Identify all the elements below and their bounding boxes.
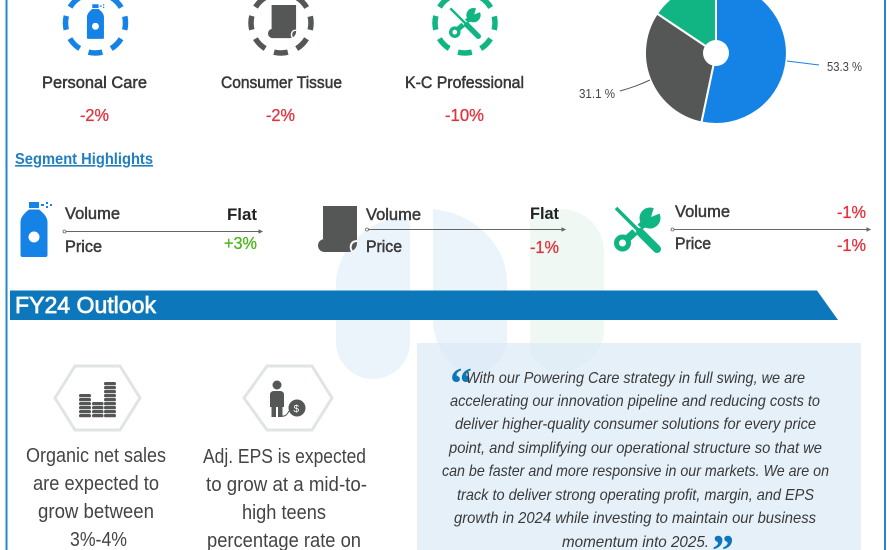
panel: consumer tissue highlight: Price [366,237,402,256]
heading: segment highlights: Segment Highlights [15,151,153,168]
panel: segment icons row [42,0,524,125]
label: personal care: Personal Care [42,73,147,92]
panel: organic net sales outlook: Organic net sales [26,445,166,467]
panel: adjusted EPS outlook: high teens [242,502,326,524]
panel: personal care highlight: +3% [224,233,257,253]
icon: spray [20,202,52,257]
panel: organic net sales outlook: grow between [38,501,154,523]
quote text: point, and simplifying our operational structure so that we [448,440,822,457]
quote text: accelerating our innovation pipeline and reducing costs to [450,393,820,410]
quote text: With our Powering Care strategy in full swing, we are [466,370,805,387]
icon: tools [616,204,664,249]
quote mark open: “ [450,359,472,408]
pie label 53.3%: 53.3 % [827,59,862,74]
right border [884,0,886,550]
icon: person and dollar in hexagon: $ [294,404,300,415]
panel: consumer tissue highlight: Volume [366,205,421,224]
value: personal care change: -2% [80,105,109,125]
panel: adjusted EPS outlook: to grow at a mid-to- [206,474,367,496]
left border [6,0,8,550]
panel: personal care highlight: Flat [227,205,257,224]
banner: FY24 Outlook [10,290,838,320]
panel: personal care highlight: Volume [65,204,120,223]
panel: adjusted EPS outlook [203,366,367,550]
panel: K-C professional highlight: -1% [837,235,866,255]
label: consumer tissue: Consumer Tissue [221,73,342,92]
label: K-C professional: K-C Professional [405,73,524,92]
panel: consumer tissue highlight: Flat [530,204,559,223]
panel: organic net sales outlook [26,366,166,550]
icon: scroll [318,206,357,252]
icon: coin stacks in hexagon [55,366,140,430]
divider arrow [673,228,870,231]
icon: person and dollar in hexagon [244,366,332,430]
panel: K-C professional highlight: Price [675,234,711,253]
quote text: track to deliver strong operating profit, margin, and EPS [457,487,814,504]
panel: adjusted EPS outlook: Adj. EPS is expected [203,446,366,468]
icon: consumer tissue dashed circle [251,0,311,53]
pie chart [579,0,862,124]
panel: personal care highlight [20,202,262,257]
panel: K-C professional highlight [616,202,870,255]
divider arrow [65,230,262,233]
panel: CEO quote [417,343,861,550]
icon: K-C professional dashed circle [435,0,495,53]
pie label 31.1%: 31.1 % [579,86,615,101]
panel: consumer tissue highlight: -1% [530,237,559,257]
banner: FY24 Outlook: FY24 Outlook [15,292,156,318]
quote text [442,370,829,550]
quote text: can be faster and more responsive in our markets. We are on [442,463,829,480]
panel: K-C professional highlight: Volume [675,202,730,221]
quote text: deliver higher-quality consumer solutions for every price [455,416,816,433]
value: K-C professional change: -10% [445,105,484,125]
panel: K-C professional highlight: -1% [837,202,866,222]
value: consumer tissue change: -2% [266,105,295,125]
divider arrow [367,228,565,231]
background watermark [336,209,604,379]
panel: organic net sales outlook: are expected to [33,473,159,495]
panel: personal care highlight: Price [65,237,102,256]
icon: personal care dashed circle [66,0,126,53]
quote text: growth in 2024 while investing to maintain our business [454,510,816,527]
panel: consumer tissue highlight [318,204,565,257]
